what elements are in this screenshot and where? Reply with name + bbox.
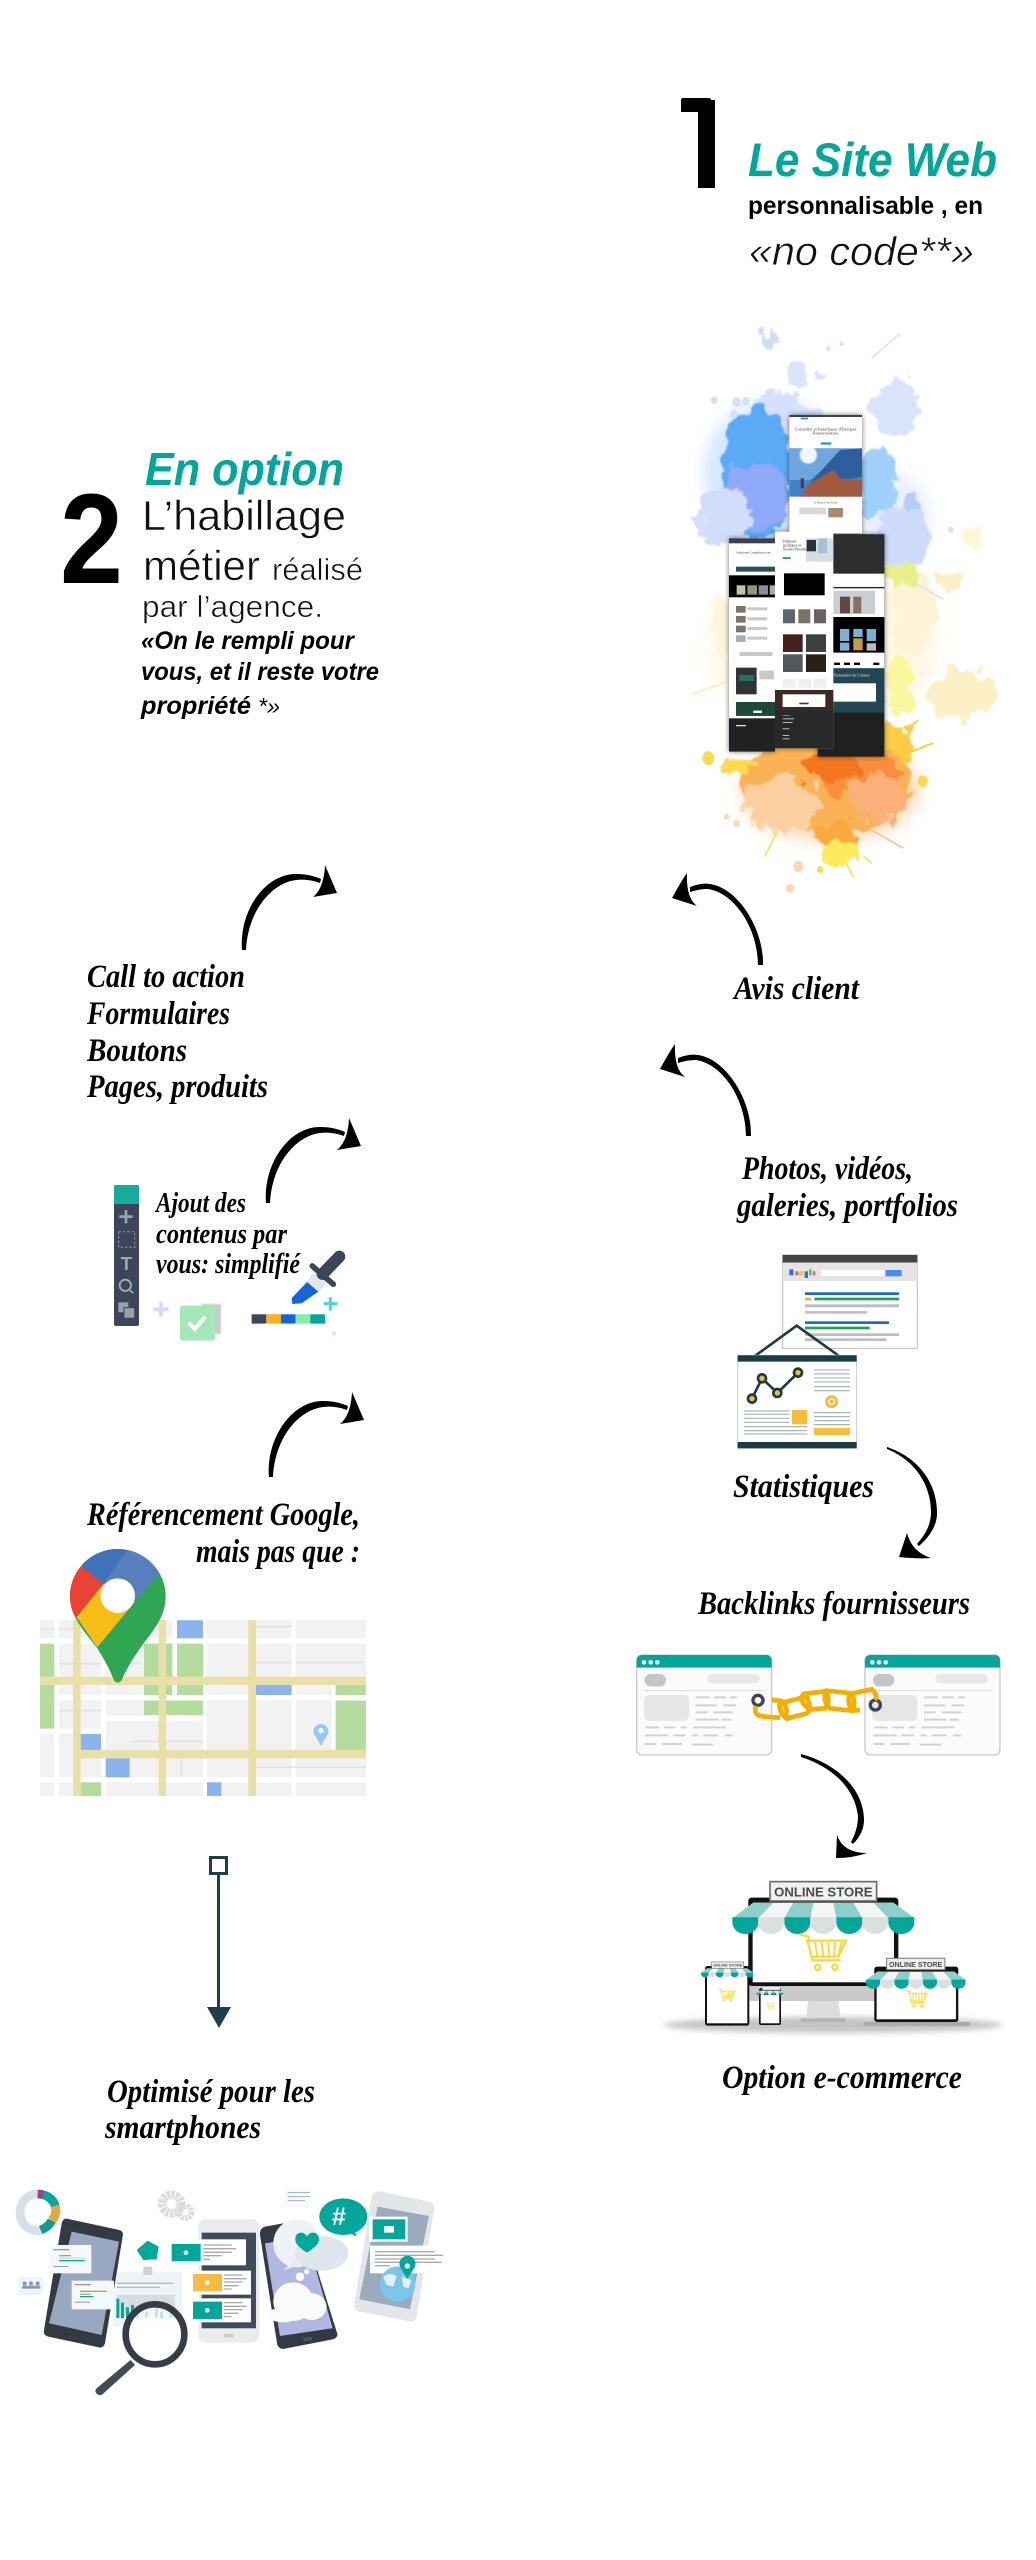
quote: vous, et il reste votre	[141, 658, 379, 686]
hash bubble	[319, 2198, 367, 2237]
subtitle: personnalisable , en	[748, 192, 983, 220]
quote: *»	[258, 693, 280, 719]
heading: En option	[60, 443, 379, 720]
option title: En option	[145, 443, 344, 495]
label: Ajout des contenus: vous: simplifié	[156, 1249, 301, 1280]
heading: Le Site Web	[681, 98, 996, 266]
hanging board	[738, 1326, 857, 1448]
label: Ajout des contenus: contenus par	[156, 1219, 288, 1250]
screen: solar: Renouvelables	[813, 431, 839, 436]
tablet	[701, 1962, 753, 2026]
check badge	[180, 1304, 221, 1341]
arrow: Avis client	[672, 873, 763, 965]
screen: left page	[729, 538, 775, 752]
website screenshots	[729, 415, 884, 757]
map	[40, 1547, 366, 1796]
gears	[162, 2195, 192, 2218]
label: Référencement Google: Référencement Google,	[86, 1497, 360, 1533]
toolbar: T	[121, 1253, 133, 1274]
icon: editor tools	[114, 1185, 339, 1341]
screen: center page: fiscales Pérennes	[783, 548, 808, 552]
quote	[140, 627, 379, 720]
label: Optimisé pour les smartphones: Optimisé pour les	[107, 2074, 315, 2110]
screen: solar: A Propos de Nous	[814, 500, 838, 504]
tablet: ONLINE STORE	[713, 1963, 743, 1968]
label: Backlinks: Backlinks fournisseurs	[697, 1586, 970, 1622]
screen: center page: juridiques et	[782, 544, 801, 548]
ground shadow	[663, 2017, 1003, 2033]
phone: white right	[354, 2191, 434, 2322]
label: Photos	[736, 1151, 958, 1224]
window right	[865, 1655, 1000, 1755]
description	[142, 492, 363, 624]
description: par l’agence.	[142, 589, 323, 624]
hash bubble: #	[332, 2203, 346, 2231]
phone: dark right	[260, 2220, 337, 2349]
screen: solar	[789, 415, 862, 533]
quote: propriété	[140, 692, 251, 720]
label: Call to action list: Formulaires	[86, 996, 230, 1032]
label: Référencement Google: mais pas que :	[196, 1534, 360, 1570]
arrow: Call to action	[242, 865, 337, 950]
shadow	[729, 415, 884, 757]
monitor: ONLINE STORE	[774, 1885, 872, 1899]
label: Option e-commerce: Option e-commerce	[722, 2060, 962, 2096]
people bubble	[18, 2277, 43, 2295]
label: Statistiques: Statistiques	[733, 1469, 874, 1505]
screen: center page	[775, 532, 833, 748]
label: Ajout des contenus	[154, 1188, 301, 1280]
arrow: Référencement	[269, 1392, 364, 1477]
pipette	[292, 1257, 339, 1304]
google search window	[783, 1255, 917, 1348]
label: Avis client: Avis client	[732, 971, 860, 1007]
globe with pin	[380, 2256, 415, 2302]
small pin	[314, 1724, 328, 1746]
quote: «On le rempli pour	[141, 627, 355, 655]
chart card	[113, 2272, 183, 2327]
description: réalisé	[272, 552, 363, 587]
connector arrow	[207, 1858, 231, 2028]
icon: online store devices	[663, 1882, 1003, 2033]
phone: dark left	[44, 2219, 123, 2348]
colour swatches	[252, 1314, 325, 1324]
magnifier	[95, 2304, 184, 2395]
laptop	[863, 1958, 970, 2026]
cloud: heart	[273, 2219, 348, 2271]
label: Call to action list	[86, 959, 268, 1105]
arrow: Ajout des contenus	[266, 1118, 361, 1203]
number 2: 2	[60, 468, 123, 611]
number 1	[681, 98, 715, 188]
label: Optimisé pour les smartphones	[104, 2074, 315, 2146]
paint splash	[690, 331, 997, 893]
label: Call to action list: Pages, produits	[86, 1069, 268, 1105]
no code line: «no code**»	[749, 230, 974, 274]
monitor	[732, 1882, 915, 2022]
icon: statistics	[738, 1255, 917, 1448]
label: Call to action list: Call to action	[87, 959, 245, 995]
arrow: to backlinks	[887, 1447, 937, 1558]
plus	[153, 1302, 169, 1317]
label: Ajout des contenus: Ajout des	[154, 1188, 246, 1219]
phone	[757, 1987, 783, 2025]
content cards	[169, 2239, 251, 2322]
laptop: ONLINE STORE	[889, 1960, 942, 1969]
label: Optimisé pour les smartphones: smartphones	[104, 2110, 261, 2146]
label: Photos: Photos, vidéos,	[741, 1151, 913, 1187]
note bubble	[283, 2191, 311, 2207]
description: métier	[143, 542, 260, 589]
icon: linked websites	[637, 1655, 1000, 1755]
screen: right page: Formulaire de Contact	[834, 673, 870, 678]
label: Photos: galeries, portfolios	[736, 1188, 958, 1224]
cloud: phone	[267, 2269, 327, 2322]
window left	[637, 1655, 772, 1755]
label: Référencement Google	[86, 1497, 360, 1570]
smartphones illustration	[18, 2191, 451, 2395]
title: Le Site Web	[748, 133, 997, 186]
screen: center page: Solutions	[783, 540, 797, 544]
hexagon bulb	[137, 2241, 159, 2275]
arrow: to store	[801, 1754, 867, 1858]
donut chart	[20, 2194, 56, 2231]
screen: solar: Conseiller et Installateur d'Energies	[795, 427, 857, 432]
teal plus	[324, 1297, 337, 1311]
label: Call to action list: Boutons	[86, 1033, 187, 1069]
toolbar	[114, 1185, 139, 1326]
Google Maps pin	[70, 1549, 166, 1682]
arrow: Photos	[660, 1044, 751, 1136]
chain	[753, 1689, 880, 1719]
screen: left page: Solutions Complètes pour	[736, 550, 771, 554]
cards on dark phone	[49, 2245, 114, 2309]
description: L’habillage	[142, 492, 346, 539]
number 1: 1	[659, 73, 749, 216]
phone: white centre	[198, 2219, 259, 2343]
right cards	[369, 2217, 451, 2273]
screen: right page	[818, 534, 884, 757]
